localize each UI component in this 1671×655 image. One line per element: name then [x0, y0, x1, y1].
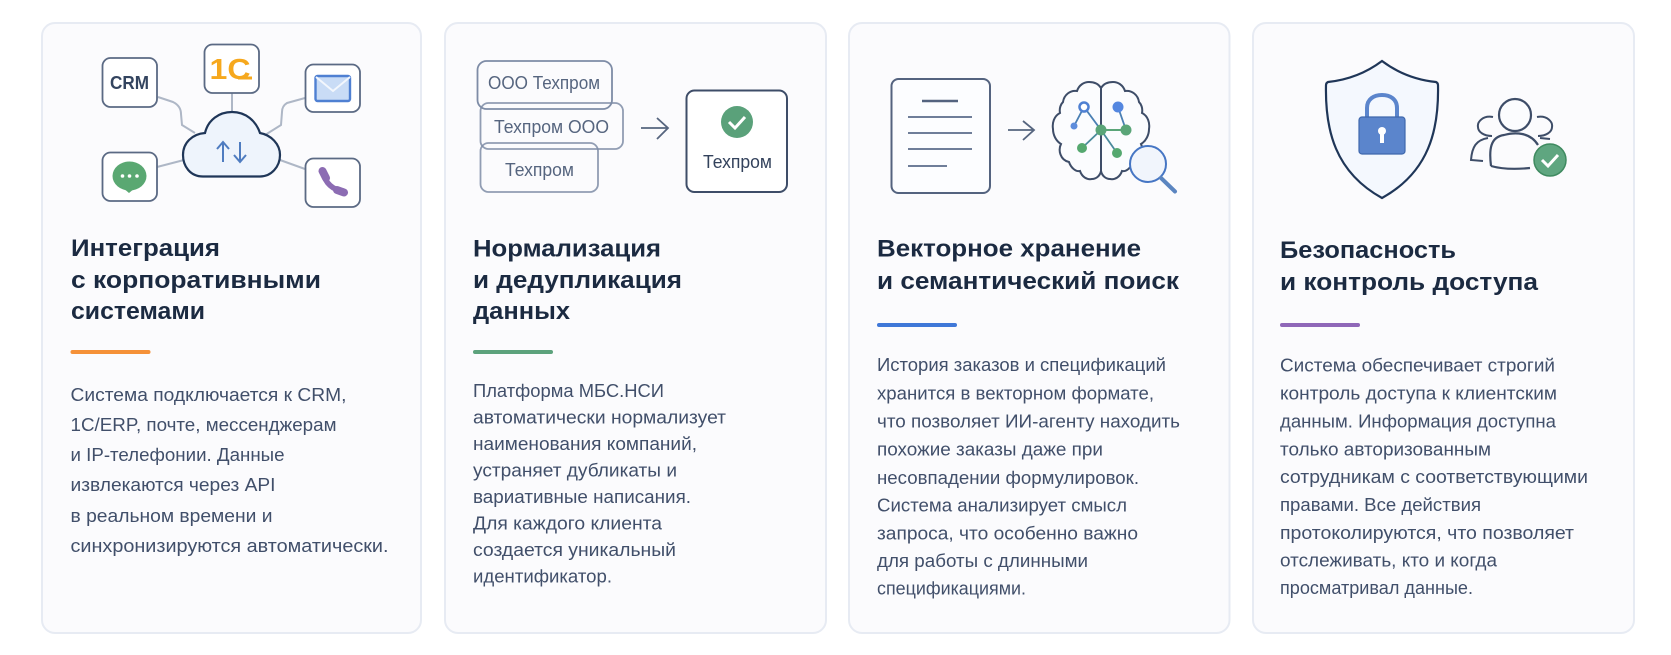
heading: Интеграция [71, 235, 220, 262]
body text: что позволяет ИИ-агенту находить [877, 412, 1180, 432]
body text: автоматически нормализует [473, 408, 726, 428]
heading [71, 235, 321, 325]
body text: хранится в векторном формате, [877, 384, 1154, 404]
body text: в реальном времени и [70, 506, 272, 526]
illustration: document to brain [892, 79, 1175, 193]
body text: запроса, что особенно важно [877, 524, 1138, 544]
heading: системами [71, 298, 205, 325]
body text [877, 355, 1180, 598]
illustration: systems connected to cloud [102, 44, 360, 207]
illustration: name variants merged: Техпром [505, 160, 574, 180]
heading: Безопасность [1280, 237, 1456, 264]
body text: отслеживать, кто и когда [1280, 550, 1498, 570]
body text: вариативные написания. [473, 487, 691, 507]
heading [1280, 237, 1539, 296]
icon: 1C box [204, 44, 259, 93]
panel: security [1253, 23, 1634, 633]
body text: создается уникальный [473, 540, 676, 560]
icon: magnifier [1130, 146, 1175, 192]
icon: users with check [1471, 99, 1566, 176]
result box: Техпром [703, 152, 772, 172]
body text: извлекаются через API [70, 475, 276, 495]
icon: CRM box: CRM [110, 73, 149, 93]
icon: CRM box [102, 58, 157, 107]
body text: устраняет дубликаты и [473, 460, 677, 480]
body text: Система подключается к CRM, [70, 385, 346, 405]
heading [877, 236, 1180, 295]
body text: идентификатор. [473, 566, 612, 586]
body text: похожие заказы даже при [877, 440, 1103, 460]
body text [1280, 356, 1588, 598]
body text: для работы с длинными [877, 551, 1088, 571]
icon: cloud [183, 112, 280, 176]
panel: vector storage [849, 23, 1230, 633]
icon: brain [1053, 82, 1149, 179]
heading: данных [473, 298, 571, 325]
heading: с корпоративными [71, 267, 321, 294]
body text [473, 381, 726, 586]
heading: и дедупликация [473, 267, 682, 294]
body text [70, 385, 389, 556]
illustration: name variants merged: ООО Техпром [488, 73, 600, 93]
illustration: shield and users [1326, 61, 1566, 198]
body text: наименования компаний, [473, 434, 697, 454]
body text: и IP-телефонии. Данные [70, 445, 284, 465]
body text: Система обеспечивает строгий [1280, 356, 1555, 376]
heading [473, 236, 682, 325]
body text: спецификациями. [877, 578, 1026, 598]
body text: Система анализирует смысл [877, 496, 1127, 516]
body text: контроль доступа к клиентским [1280, 384, 1557, 404]
icon: phone box [306, 158, 360, 207]
body text: сотрудникам с соответствующими [1280, 467, 1588, 487]
body text: просматривал данные. [1280, 578, 1473, 598]
body text: несовпадении формулировок. [877, 468, 1139, 488]
panel: integration [42, 23, 421, 633]
result box [686, 90, 787, 192]
body text: Платформа МБС.НСИ [473, 381, 664, 401]
body text: 1С/ERP, почте, мессенджерам [70, 415, 336, 435]
icon: mail box [306, 64, 360, 112]
body text: только авторизованным [1280, 440, 1491, 460]
panel: normalization [445, 23, 826, 633]
body text: История заказов и спецификаций [877, 355, 1166, 375]
body text: правами. Все действия [1280, 495, 1481, 515]
heading: и семантический поиск [877, 268, 1180, 295]
illustration: name variants merged: Техпром ООО [494, 117, 609, 137]
heading: и контроль доступа [1280, 269, 1539, 296]
body text: Для каждого клиента [473, 514, 663, 534]
arrow [641, 118, 668, 139]
icon: shield with lock [1326, 61, 1438, 198]
body text: синхронизируются автоматически. [70, 536, 389, 556]
heading: Векторное хранение [877, 236, 1141, 262]
heading: Нормализация [473, 236, 661, 262]
icon: document [892, 79, 990, 193]
arrow [1008, 121, 1034, 140]
icon: 1C box: 1С [210, 54, 251, 86]
body text: данным. Информация доступна [1280, 412, 1557, 432]
body text: протоколируются, что позволяет [1280, 523, 1574, 543]
icon: chat box [102, 152, 157, 201]
illustration: name variants merged [478, 61, 787, 192]
